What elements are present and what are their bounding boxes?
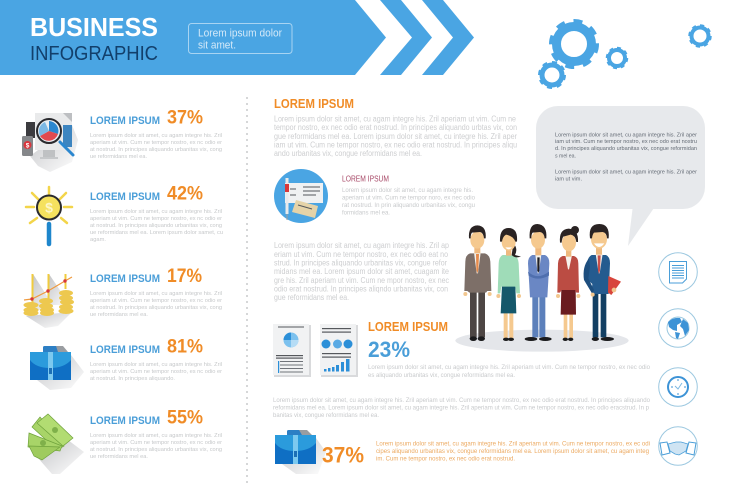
stat row 55% [28,408,222,474]
row text: Lorem ipsum dolor sit amet, cu agam integre his. Zril [90,291,222,297]
subsection text [342,187,476,216]
icon: globe circle [659,309,697,347]
bubble text: iam ut vim. [555,176,582,182]
icon: magnifier with dollar [26,187,72,244]
row text: ue reformidans mel ea. [90,312,148,318]
stat row 37% [22,108,222,172]
row heading: LOREM IPSUM [90,415,160,427]
row text [90,362,222,382]
row text: Lorem ipsum dolor sit amet, cu agam integre his. Zril [90,209,222,215]
bubble text: Lorem ipsum dolor sit amet, cu agam integre his. Zril aper [555,170,697,176]
bottom paragraph: banitas vix, congue reformidans mel ea. [273,412,379,419]
icon: monitor with magnifier [22,113,78,172]
icon: briefcase [30,346,84,390]
row percentage: 42% [167,184,203,204]
row text: at nostrud. In principes aliquando urbanitas vix, cong [90,147,222,153]
row text: ue reformidans mel ea. [90,454,148,460]
bubble text: d. In principes aliquando urbanitas vix, congue reformidan [555,146,697,152]
row text [90,291,222,318]
icon: document circle [659,253,697,291]
icon: magnifier with dollar: $ [45,200,53,216]
icon: coins chart [24,274,74,328]
icon: bottom briefcase [275,430,326,474]
center intro text: iam ut vim. Cum ne tempor nostro, ex nec odio erat nostrud. In principes aliqu [274,140,517,150]
orange text [376,440,650,462]
heading: lorem ipsum: LOREM IPSUM [368,320,448,334]
person 5 navy suit with folder [584,224,621,341]
icon: money banknotes [28,414,84,474]
person 3 blue suit [525,224,552,341]
center paragraph: strud. In principes aliquando urbanitas vix, congue refor [274,258,447,268]
stat row 81% [30,336,222,390]
row text: agam. [90,237,106,243]
row text: ue reformidans mel ea. Lorem ipsum dolor samet, cu [90,230,223,236]
bubble text: iam ut vim. Cum ne tempor nostro, ex nec odo erat nostru [555,139,697,145]
row text: at nostrud. In principes aliquando urbanitas vix, cong [90,447,222,453]
icon: gears [540,22,710,88]
row text: aperiam ut vim. Cum ne tempor nostro, ex nc odio er [90,298,222,304]
subsection text: Lorem ipsum dolor sit amet, cu agam integre his. [342,187,473,194]
icon: blue circle with documents [274,169,328,223]
percentage caption: es aliquando urbanitas vix, congue reformidans mel ea. [368,372,515,379]
center intro text [274,114,517,158]
row percentage: 81% [167,336,203,358]
row text: Lorem ipsum dolor sit amet, cu agam integre his. Zril [90,362,222,368]
row text: aperiam ut vim. Cum ne tempor nostro, ex nc odio er [90,216,222,222]
row text: ue reformidans mel ea. [90,154,147,160]
orange text: Lorem ipsum dolor sit amet, cu agam integre his. Zril aperiam ut vim. Cum ne tempor nostro, ex ec odi [376,440,650,448]
row heading: LOREM IPSUM [90,273,160,285]
bottom paragraph [273,397,651,419]
percentage 37%: 37% [322,442,364,468]
row heading: LOREM IPSUM [90,115,160,127]
person 1 grey suit [463,225,492,341]
panel: left column statistics [22,108,223,474]
subsection text: formidans mel ea. [342,210,390,216]
title: infographic: INFOGRAPHIC [30,42,158,65]
row text: Lorem ipsum dolor sit amet, cu agam integre his. Zril [90,133,222,139]
percentage caption: Lorem ipsum dolor sit amet, cu agam integre his. Zril aperiam ut vim. Cum ne tempor nostro, ex nec odio [368,364,651,371]
center paragraph: odio erat nostrud. In principes aliqndo urbanitas vix, con [274,284,448,294]
row text [90,133,222,160]
row text: aperiam ut vim. Cum ne tempor nostro, es nc odio er [90,369,222,375]
row percentage: 17% [167,266,202,287]
bubble text: Lorem ipsum dolor sit amet, cu agam integre his. Zril aper [555,132,697,138]
icon: monitor with magnifier: $ [26,142,30,150]
bubble text [555,132,697,182]
row text: Lorem ipsum dolor sit amet, cu agam integre his. Zril [90,433,222,439]
bottom paragraph: Lorem ipsum dolor sit amet, cu agam integre his. Zril aperiam ut vim. Cum ne tempor nostro, ex nec odio erat nostrud. In principes aliquando [273,397,651,404]
center paragraph [274,241,449,302]
percentage caption [368,364,651,379]
header chevrons [380,0,474,75]
row text: at nostrud. In principes aliquando urbanitas vix, cong [90,305,222,311]
speech bubble [536,106,705,246]
center intro text: Lorem ipsum dolor sit amet, cu agam integre his. Zril aperiam ut vim. Cum ne [274,114,516,124]
person 4 red jacket [556,226,580,341]
subheading: lorem ipsum: LOREM IPSUM [342,174,389,184]
percentage 23%: 23% [368,337,410,362]
person 2 green sweater [496,228,521,341]
illustration: team of five people [455,224,629,352]
header callout box: sit amet. [198,40,236,52]
header callout box [188,24,292,54]
bottom paragraph: reformidans mel ea. Lorem ipsum dolor sit amet, cu agam integre his. Zril aperiam ut vim. Cum ne tempor nostro, ex nec odio eracstrud. In p [273,404,650,412]
center paragraph: Lorem ipsum dolor sit amet, cu agam integre his. Zril ap [274,241,449,250]
row percentage: 55% [167,408,203,428]
center intro text: gue reformidans mel ea. Lorem ipsum dolor sit amet, cu integre his. Zril aper [274,132,517,141]
row heading: LOREM IPSUM [90,344,160,356]
center paragraph: gre his. Zril aperiam ut vim. Cum ne mpor nostro, ex nec [274,276,449,285]
icon: clock circle [659,368,697,406]
icon: report document with bars [320,324,358,377]
icon: report document with pie [273,324,311,377]
row text: aperiam ut vim. Cum ne tempor nostro, ex nc odio er [90,440,222,446]
title: business: BUSINESS [30,12,158,42]
center heading: LOREM IPSUM [274,97,354,111]
header banner [0,0,386,75]
center intro text: tempor nostro, ex nec odio erat nostrud. In principes aliquando urbtas vix, con [274,123,517,132]
orange text: im. Cum ne tempor nostro, ex nec odio erat nostrud. [376,456,515,462]
center paragraph: gue reformidans mel ea. [274,293,349,302]
center paragraph: midans mel ea. Lorem ipsum dolor sit amet, cuagam ite [274,267,449,276]
subsection text: rat nostrud. In prin aliquando urbanitas vix, congu [342,202,476,209]
orange text: cipes aliquando urbanitas vix, congue reformidans mel ea. Lorem ipsum dolor sit amet, cu agam integ [376,448,650,455]
icon: handshake circle [659,427,697,465]
stat row 42% [26,184,223,244]
row text: aperiam ut vim. Cum ne tempor nostro, ex nc odio er [90,140,222,146]
stat row 17% [24,266,222,328]
subsection text: aperiam ut vim. Cum ne tempor noro, ex nec odio [342,194,476,202]
bubble text: s mel ea. [555,154,576,160]
center intro text: ando urbanitas vix, congue reformidans mel ea. [274,149,422,158]
row text [90,209,223,243]
row percentage: 37% [167,108,203,128]
row text: at nostrud. In principes aliquando urbanitas vix, cong [90,223,222,229]
row heading: LOREM IPSUM [90,191,160,203]
header callout box: Lorem ipsum dolor [198,28,282,40]
center paragraph: eriam ut vim. Cum ne tempor nostro, ex nec odio eat no [274,250,448,259]
row text [90,433,222,460]
row text: at nostrud. In principes aliquando. [90,376,175,382]
